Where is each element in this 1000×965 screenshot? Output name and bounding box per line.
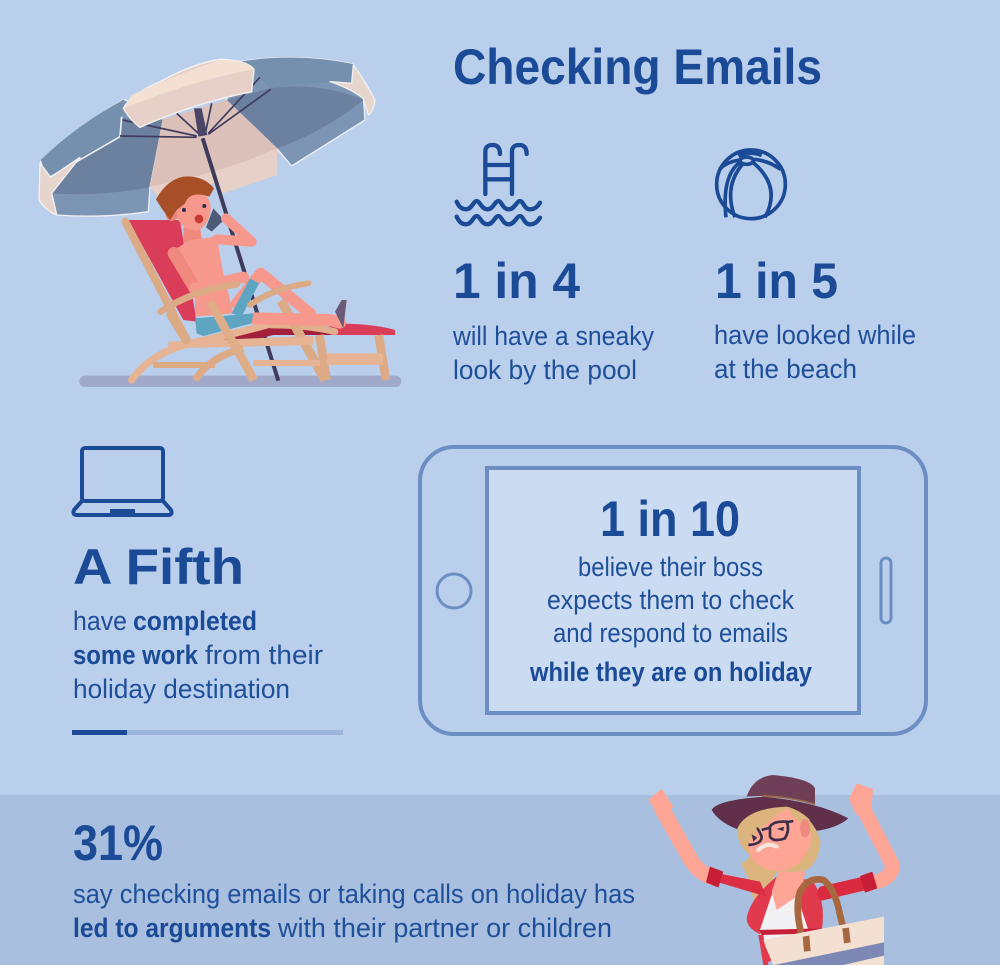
stat: a fifth: completed — [133, 606, 257, 636]
hat crown — [747, 775, 815, 804]
umbrella — [39, 57, 375, 381]
hair — [737, 807, 821, 905]
illustration: frustrated woman with bag — [650, 775, 892, 965]
stat: a fifth: holiday destination — [73, 674, 290, 704]
progress bar: one fifth — [72, 730, 343, 735]
hat brim — [712, 797, 848, 831]
ground shadow — [79, 376, 401, 387]
stat: a fifth: from their — [205, 640, 323, 670]
head — [173, 188, 211, 231]
stat: 31% arguments: 31% — [73, 815, 163, 871]
stat: 1 in 5 at the beach: 1 in 5 — [715, 253, 838, 309]
raised arm — [217, 218, 252, 242]
stat: 1 in 4 by the pool: will have a sneaky — [452, 321, 654, 351]
phone text: while they are on holiday — [529, 657, 812, 687]
stat: 1 in 5 at the beach: at the beach — [714, 354, 857, 384]
bent leg — [237, 273, 310, 313]
phone text: 1 in 10 — [600, 491, 740, 547]
lounger — [125, 220, 395, 380]
panel: phone — [420, 447, 926, 734]
icon: beach ball — [717, 150, 785, 219]
phone text: and respond to emails — [553, 618, 788, 648]
stat: a fifth: A Fifth — [73, 539, 244, 595]
stat: 1 in 4 by the pool — [452, 253, 654, 385]
stat: 31% arguments — [73, 815, 635, 943]
icon: laptop — [73, 448, 172, 515]
stat: 31% arguments: with their partner or children — [277, 913, 612, 943]
stat: a fifth: some work — [73, 640, 199, 670]
stat: 1 in 5 at the beach: have looked while — [714, 320, 916, 350]
arms — [661, 807, 713, 878]
stat: 1 in 4 by the pool: 1 in 4 — [453, 253, 580, 309]
face — [747, 808, 812, 871]
jacket — [747, 877, 823, 965]
man — [156, 176, 347, 380]
glasses — [748, 821, 793, 845]
phone text: expects them to check — [547, 585, 794, 615]
chair arm rests — [161, 284, 237, 312]
pole — [203, 138, 278, 381]
bottom band — [0, 795, 1000, 965]
top canopy panel — [123, 59, 254, 127]
title: Checking Emails — [453, 39, 822, 95]
icon: pool ladder — [457, 145, 540, 224]
torso — [177, 237, 233, 317]
stat: 1 in 4 by the pool: look by the pool — [453, 355, 637, 385]
stat: 31% arguments: led to arguments — [73, 913, 271, 943]
near arm — [174, 253, 195, 288]
phone text: believe their boss — [578, 552, 763, 582]
stat: a fifth — [73, 539, 323, 704]
illustration: man on lounger under umbrella — [39, 57, 401, 387]
bag — [798, 879, 847, 950]
stat: a fifth: have — [73, 606, 127, 636]
mouth — [758, 845, 777, 850]
phone — [206, 208, 224, 232]
stat: 31% arguments: say checking emails or taking calls on holiday has — [73, 879, 635, 909]
straight leg — [255, 318, 340, 323]
stat: 1 in 5 at the beach — [714, 253, 916, 384]
phone text — [529, 491, 812, 687]
ribs — [120, 77, 271, 137]
